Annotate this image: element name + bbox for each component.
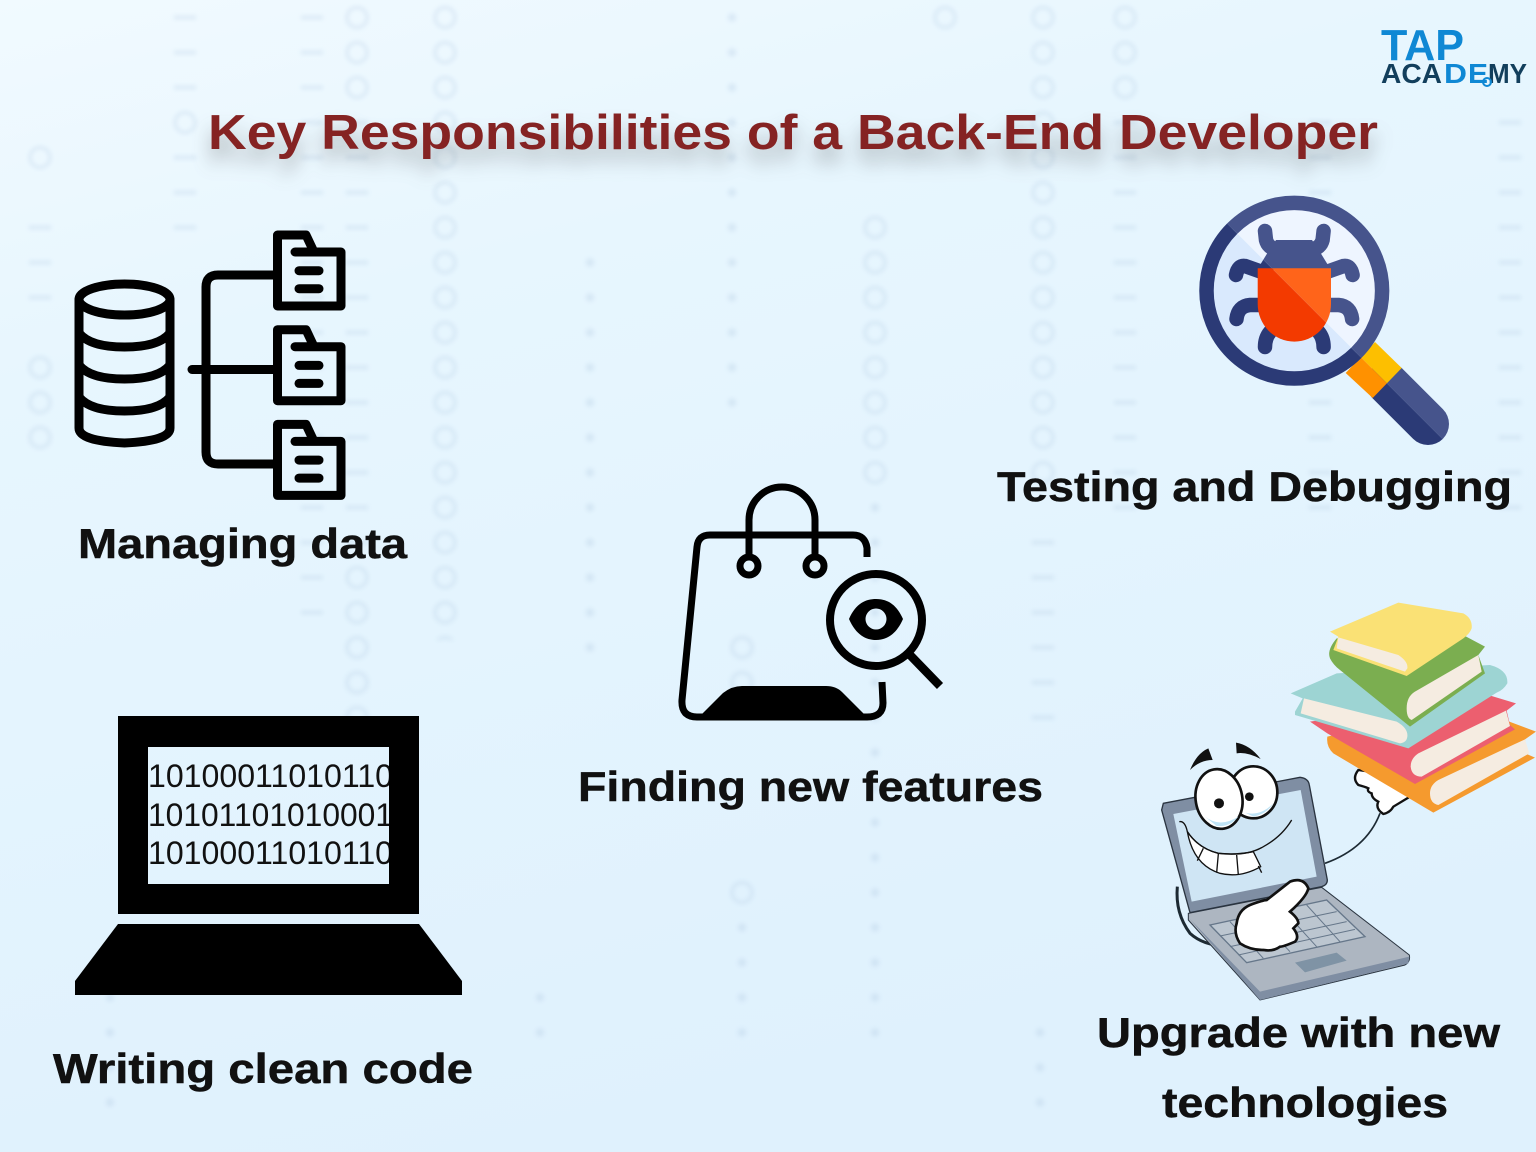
- icon: database with documents: [79, 235, 341, 495]
- icon: magnifier with bug: [1206, 203, 1428, 424]
- icon part: bag outline: [682, 535, 883, 717]
- laptop base and keyboard: [1188, 887, 1410, 1000]
- logo: Tap Academy: ACA: [1381, 58, 1442, 89]
- label: Testing and Debugging: Testing and Debugging: [997, 463, 1512, 510]
- icon part: bag handle: [740, 487, 824, 575]
- binary text: 10101101010001: [148, 797, 393, 833]
- label: Upgrade with new technologies: Upgrade with new: [1097, 1009, 1500, 1056]
- left arm: [1177, 887, 1235, 946]
- label: Managing data: Managing data: [78, 520, 408, 567]
- logo: Tap Academy: TAP: [1381, 21, 1464, 70]
- icon part: magnifier: [830, 574, 940, 686]
- icon: laptop with binary code: [75, 716, 462, 995]
- logo: Tap Academy: E: [1468, 58, 1488, 89]
- icon part: connector tree: [192, 275, 275, 464]
- illustration: cartoon laptop holding books: [1162, 603, 1536, 1000]
- binary text: [150, 764, 389, 864]
- pointing hand: [1236, 880, 1308, 950]
- darker half: [1206, 203, 1428, 424]
- laptop screen: [118, 716, 419, 914]
- icon part: bag base: [698, 686, 868, 718]
- logo: Tap Academy: D: [1444, 58, 1467, 89]
- binary text: 10100011010110: [148, 835, 393, 871]
- book stack: [1291, 603, 1536, 813]
- laptop base: [75, 924, 462, 995]
- smiling mouth: [1179, 820, 1292, 875]
- hand holding books: [1355, 770, 1410, 814]
- logo: Tap Academy: [1381, 21, 1527, 89]
- label: Upgrade with new technologies: [1097, 1009, 1500, 1126]
- lighter half: [1206, 203, 1428, 424]
- label: Finding new features: Finding new features: [578, 763, 1043, 810]
- icon part: documents: [278, 235, 341, 495]
- label: Upgrade with new technologies: technologies: [1162, 1079, 1448, 1126]
- label: Writing clean code: Writing clean code: [53, 1045, 473, 1092]
- icon part: database cylinder: [79, 284, 170, 443]
- eyes and brows: [1190, 743, 1277, 833]
- logo: Tap Academy: MY: [1488, 58, 1527, 89]
- binary text: 10100011010110: [148, 758, 393, 794]
- right arm: [1325, 813, 1380, 863]
- laptop lid and screen: [1162, 777, 1327, 913]
- icon: shopping bag with eye magnifier: [682, 487, 940, 718]
- title: Key Responsibilities of a Back-End Developer: [208, 106, 1378, 160]
